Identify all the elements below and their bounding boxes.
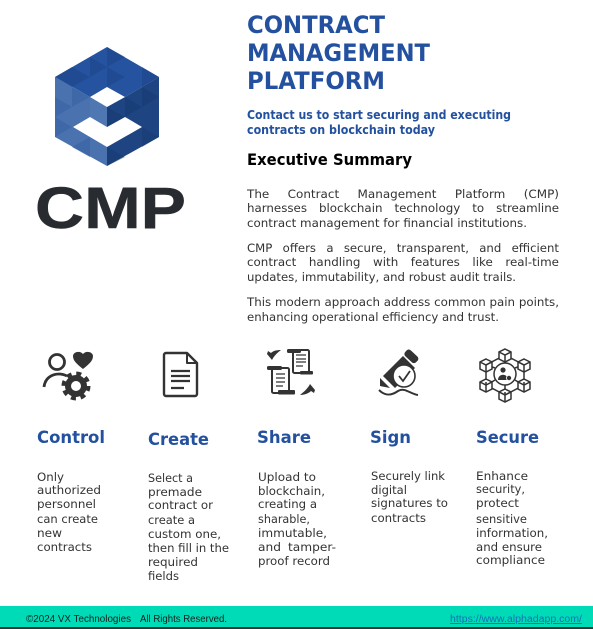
text block: summary xyxy=(246,187,559,324)
icon: sign xyxy=(379,348,420,395)
footer xyxy=(0,606,593,629)
text block: summary: contract handling with features like real-time xyxy=(247,255,559,269)
column: secure: Enhance xyxy=(476,469,528,483)
column: create: required xyxy=(148,555,198,569)
footer: All Rights Reserved. xyxy=(140,614,227,625)
column: secure: protect xyxy=(476,496,520,510)
subtitle: Contact us to start securing and executing xyxy=(247,108,511,122)
text block: summary: contract management for financial institutions. xyxy=(247,216,527,230)
column: sign: contracts xyxy=(371,511,426,525)
column: share: Upload to xyxy=(258,470,316,484)
column: sign: digital xyxy=(371,483,407,497)
column: control xyxy=(37,428,105,554)
column: secure: information, xyxy=(476,526,548,540)
column: secure: compliance xyxy=(476,553,545,567)
column: secure: Secure xyxy=(476,428,539,448)
subtitle: contracts on blockchain today xyxy=(247,123,435,137)
text block: summary: The Contract Management Platform (CMP) xyxy=(246,187,559,201)
column: share: blockchain, xyxy=(258,484,325,498)
heading: executive summary: Executive Summary xyxy=(247,150,413,169)
column: share: and tamper- xyxy=(258,540,336,554)
column: create: premade xyxy=(148,485,202,499)
column: share: Share xyxy=(257,428,311,448)
column: share: immutable, xyxy=(258,526,327,540)
footer: ©2024 VX Technologies xyxy=(26,614,131,625)
column: share: sharable, xyxy=(258,512,310,526)
column: sign xyxy=(370,428,448,525)
icon: control xyxy=(44,352,93,398)
column: secure: and ensure xyxy=(476,540,542,554)
title: PLATFORM xyxy=(247,67,385,95)
column: sign: Securely link xyxy=(371,469,445,483)
column: control: authorized xyxy=(37,483,101,497)
text block: summary: harnesses blockchain technology to streamline xyxy=(247,201,559,215)
text block: summary: updates, immutability, and robust audit trails. xyxy=(247,270,516,284)
column: create: create a xyxy=(148,513,195,527)
icon: secure xyxy=(480,349,530,402)
column: control: personnel xyxy=(37,497,96,511)
column: secure xyxy=(476,428,548,567)
text block: summary: enhancing operational efficiency and trust. xyxy=(247,310,499,324)
column: create: then fill in the xyxy=(148,541,229,555)
footer: https://www.alphadapp.com/ xyxy=(450,614,582,625)
icon: create xyxy=(164,353,197,396)
column: create: custom one, xyxy=(148,527,221,541)
title xyxy=(247,11,431,95)
column: control: can create xyxy=(37,512,98,526)
text block: summary: This modern approach address common pain points, xyxy=(246,295,559,309)
logo: CMP cube: CMP xyxy=(35,176,186,241)
logo: CMP cube xyxy=(35,47,186,241)
column: share: proof record xyxy=(258,554,330,568)
column: secure: sensitive xyxy=(476,512,527,526)
column: create: fields xyxy=(148,569,179,583)
column: control: new xyxy=(37,526,62,540)
subtitle xyxy=(247,108,511,137)
title: CONTRACT xyxy=(247,11,386,39)
text block: summary: CMP offers a secure, transparent, and efficient xyxy=(247,241,559,255)
title: MANAGEMENT xyxy=(247,39,431,67)
column: control: contracts xyxy=(37,540,92,554)
column: sign: signatures to xyxy=(371,496,448,510)
column: control: Only xyxy=(37,470,64,484)
column: sign: Sign xyxy=(370,428,411,448)
column: control: Control xyxy=(37,428,105,448)
column: share xyxy=(257,428,336,568)
column: create xyxy=(148,430,229,583)
icon: share xyxy=(267,349,315,395)
column: create: Select a xyxy=(148,471,193,485)
column: create: contract or xyxy=(148,498,213,512)
column: share: creating a xyxy=(258,497,317,511)
column: secure: security, xyxy=(476,482,525,496)
column: create: Create xyxy=(148,430,209,450)
